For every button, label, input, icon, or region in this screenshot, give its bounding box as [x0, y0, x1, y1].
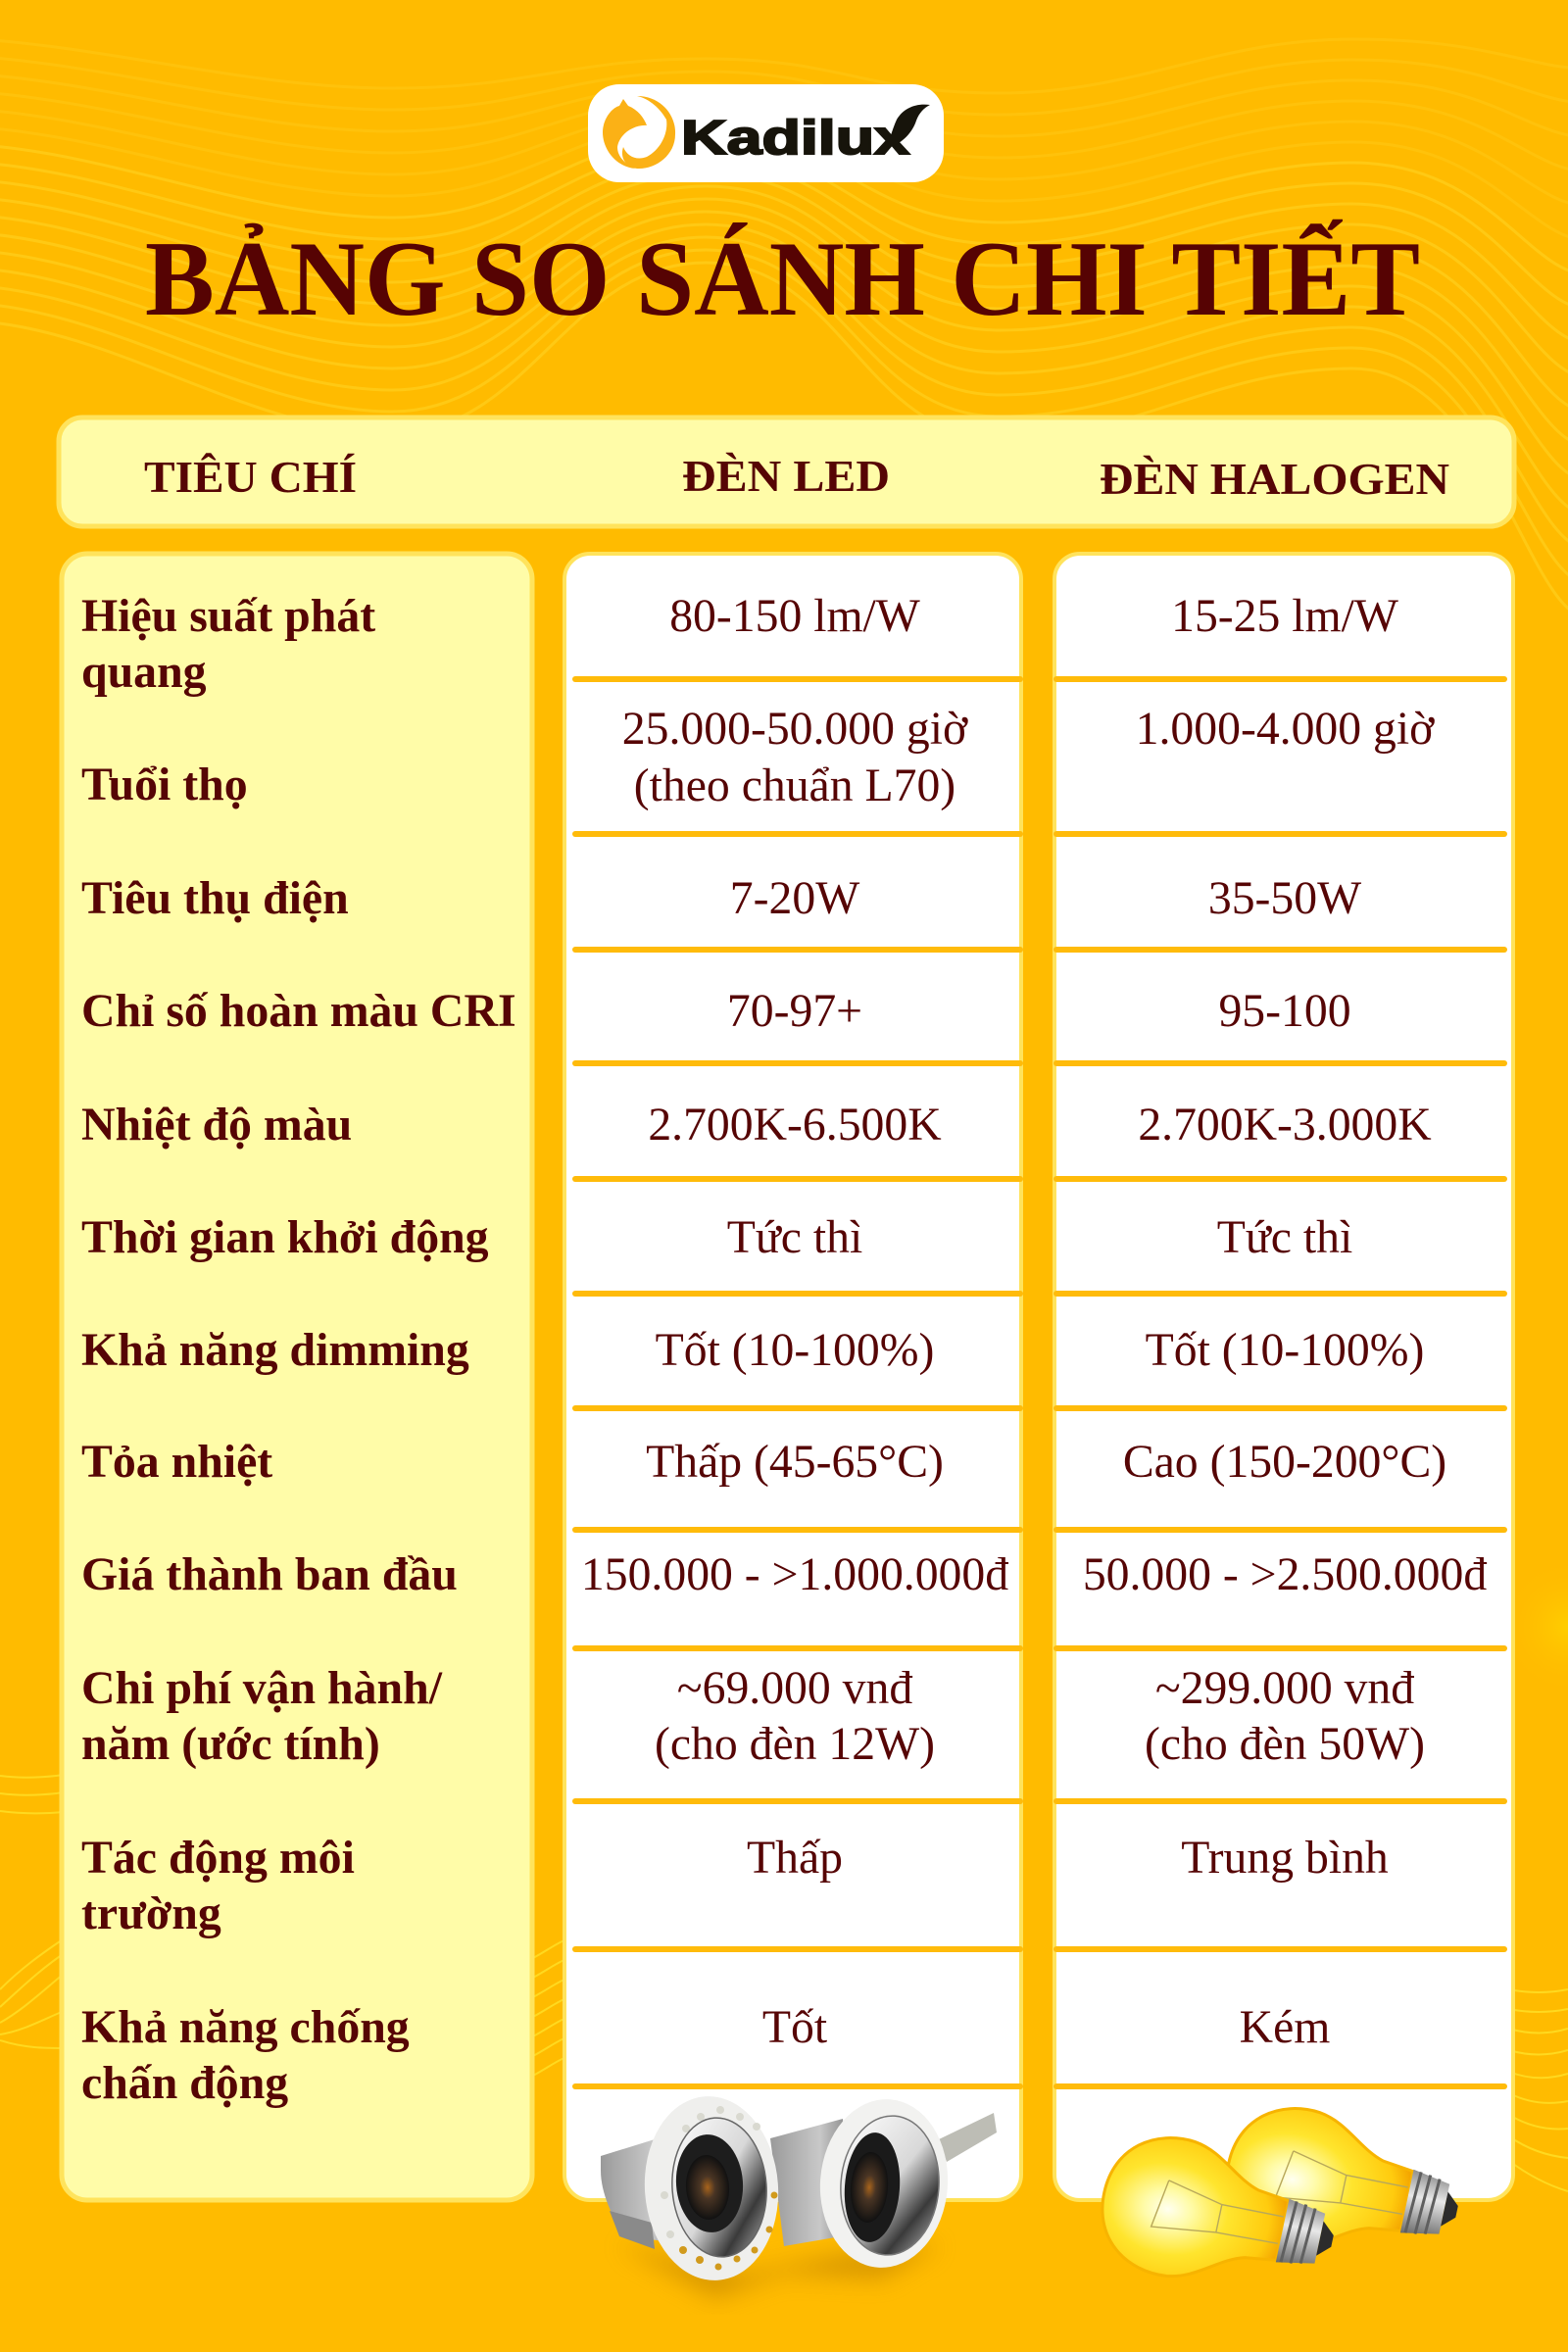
right downlight: [770, 2095, 997, 2272]
criterion: lifespan: Tuổi thọ: [81, 759, 248, 810]
icon: fox logo: [603, 96, 675, 169]
criterion: CRI: Chỉ số hoàn màu CRI: [81, 985, 516, 1037]
shadow: [617, 2244, 941, 2298]
criterion: colour temperature: Nhiệt độ màu: [81, 1099, 352, 1151]
illustration: LED downlights: [601, 2091, 997, 2298]
LED value: efficacy: 80-150 lm/W: [669, 590, 920, 642]
halogen value: price: 50.000 - >2.500.000đ: [1083, 1548, 1487, 1600]
LED value: heat: Thấp (45-65°C): [646, 1436, 944, 1488]
rear bulb: [1214, 2096, 1471, 2279]
LED value: running cost: ~69.000 vnđ: [677, 1662, 912, 1714]
logo badge: [588, 84, 944, 182]
halogen value: colour temperature: 2.700K-3.000K: [1138, 1099, 1432, 1151]
halogen value: CRI: 95-100: [1218, 985, 1351, 1037]
panel: criteria column: [62, 554, 532, 2200]
LED value: CRI: 70-97+: [727, 985, 862, 1037]
halogen value: start-up: Tức thì: [1217, 1211, 1352, 1263]
criterion: luminous efficacy: quang: [81, 646, 207, 698]
header: halogen: ĐÈN HALOGEN: [1100, 454, 1449, 504]
halogen value: running cost: ~299.000 vnđ: [1155, 1662, 1414, 1714]
criterion: start-up time: Thời gian khởi động: [81, 1211, 489, 1263]
header: LED: ĐÈN LED: [682, 451, 890, 501]
LED value: price: 150.000 - >1.000.000đ: [581, 1548, 1008, 1600]
title: BẢNG SO SÁNH CHI TIẾT: [145, 220, 1420, 338]
LED value: start-up: Tức thì: [727, 1211, 862, 1263]
criterion: dimming: Khả năng dimming: [81, 1324, 469, 1376]
halogen value: shock: Kém: [1240, 2001, 1330, 2053]
LED value: lifespan: (theo chuẩn L70): [634, 760, 956, 811]
criterion: power consumption: Tiêu thụ điện: [81, 872, 349, 924]
panel: halogen column: [1054, 554, 1513, 2200]
criterion: environmental impact: trường: [81, 1887, 221, 1939]
icon: fox tail: [886, 105, 930, 148]
front bulb: [1090, 2126, 1347, 2309]
header: criteria: TIÊU CHÍ: [144, 452, 357, 502]
background wave lines: sides: [0, 1558, 1568, 2191]
LED value: running cost: (cho đèn 12W): [655, 1718, 935, 1770]
criterion: luminous efficacy: Hiệu suất phát: [81, 590, 375, 642]
criterion: shock resistance: chấn động: [81, 2057, 288, 2109]
LED value: power: 7-20W: [730, 872, 859, 924]
LED value: shock: Tốt: [762, 2001, 827, 2053]
left downlight: [601, 2091, 784, 2285]
halogen value: dimming: Tốt (10-100%): [1146, 1324, 1424, 1376]
halogen value: lifespan: 1.000-4.000 giờ: [1136, 703, 1435, 755]
table header bar: [59, 417, 1514, 526]
criterion: annual running cost: năm (ước tính): [81, 1718, 380, 1770]
criterion: heat: Tỏa nhiệt: [81, 1436, 272, 1488]
background wave lines: top: [0, 39, 1568, 617]
LED value: dimming: Tốt (10-100%): [656, 1324, 934, 1376]
wordmark: Kadilux: [681, 112, 909, 165]
LED value: colour temperature: 2.700K-6.500K: [648, 1099, 942, 1151]
halogen value: efficacy: 15-25 lm/W: [1171, 590, 1398, 642]
criterion: shock resistance: Khả năng chống: [81, 2001, 410, 2053]
illustration: halogen bulbs: [1090, 2096, 1471, 2309]
criterion: annual running cost: Chi phí vận hành/: [81, 1662, 442, 1714]
halogen value: environment: Trung bình: [1181, 1832, 1389, 1884]
criterion: environmental impact: Tác động môi: [81, 1832, 355, 1884]
panel: LED column: [564, 554, 1023, 2200]
LED value: environment: Thấp: [747, 1832, 843, 1884]
criterion: initial price: Giá thành ban đầu: [81, 1548, 458, 1600]
halogen value: power: 35-50W: [1208, 872, 1361, 924]
LED value: lifespan: 25.000-50.000 giờ: [622, 703, 967, 755]
halogen value: heat: Cao (150-200°C): [1123, 1436, 1446, 1488]
halogen value: running cost: (cho đèn 50W): [1145, 1718, 1425, 1770]
